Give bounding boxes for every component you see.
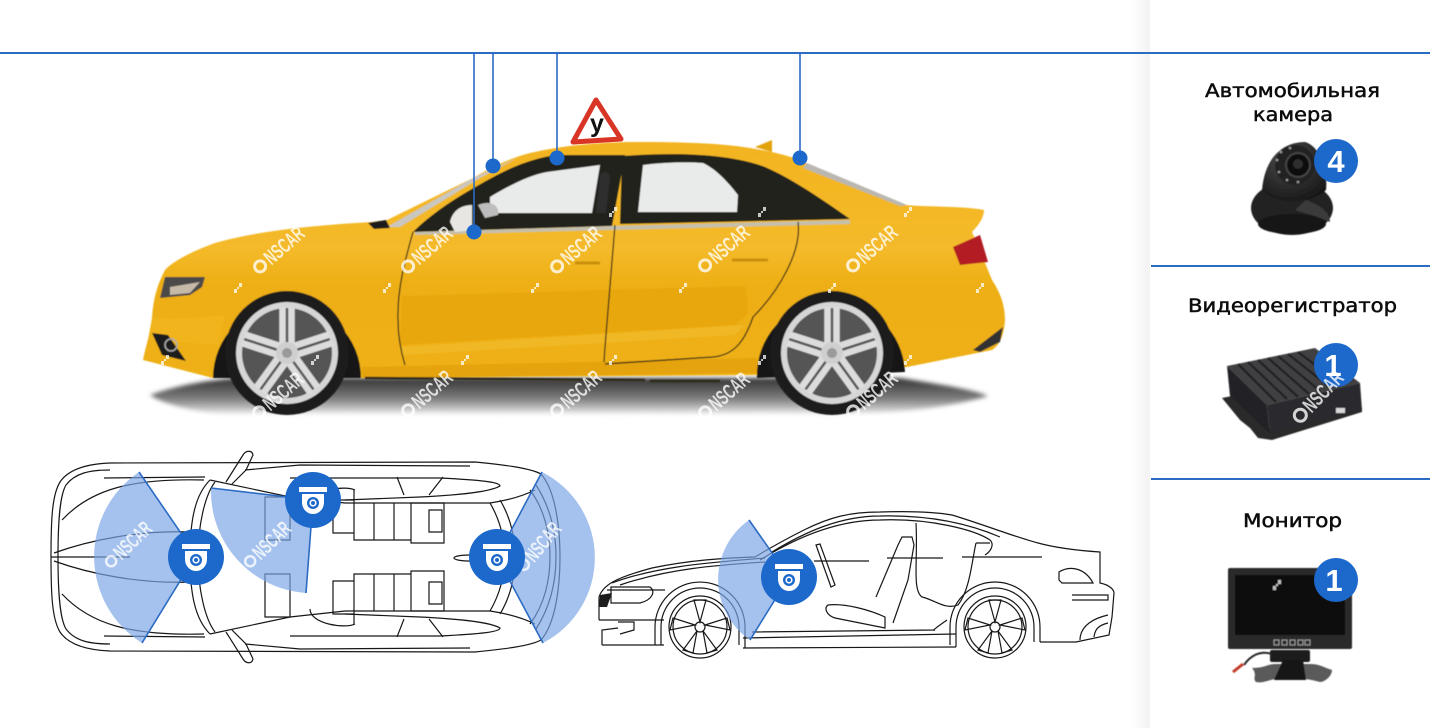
camera icon: rear xyxy=(469,529,525,585)
student driver roof sign xyxy=(573,100,621,142)
top blue rule xyxy=(0,52,1430,54)
count badge: 4 cameras xyxy=(1314,139,1358,183)
count badge: 1 recorder: 1 xyxy=(1324,348,1342,383)
watermarks on sedan xyxy=(161,207,984,425)
watermarks on sedan: NSCAR xyxy=(853,367,903,415)
watermarks on sedan: NSCAR xyxy=(259,368,309,416)
count badge: 1 recorder xyxy=(1314,343,1358,387)
camera icon: side view xyxy=(761,549,817,605)
label: automotive camera: Автомобильная xyxy=(1205,81,1380,102)
camera coverage: cabin xyxy=(211,488,313,593)
camera position markers with leader lines xyxy=(466,53,808,240)
divider: recorder section xyxy=(1151,478,1430,480)
watermarks on top view: NSCAR xyxy=(248,517,296,564)
watermarks on top view xyxy=(100,517,566,576)
divider: camera section xyxy=(1151,265,1430,267)
top-view car line drawing xyxy=(51,451,560,663)
watermarks on sedan: NSCAR xyxy=(705,368,755,416)
label: monitor: Монитор xyxy=(1243,511,1342,532)
camera coverage: front xyxy=(94,472,196,643)
camera coverage: rear xyxy=(497,472,595,643)
label: automotive camera: камера xyxy=(1253,105,1333,126)
product: dome camera xyxy=(1251,142,1333,235)
label: automotive camera xyxy=(1205,81,1380,126)
watermarks on sedan: NSCAR xyxy=(853,221,903,269)
watermark on recorder xyxy=(1288,367,1349,428)
camera icon: front xyxy=(168,529,224,585)
watermarks on sedan: NSCAR xyxy=(408,222,458,270)
yellow sedan photo xyxy=(143,140,1005,425)
side-view car line drawing xyxy=(599,512,1114,658)
watermarks on top view: NSCAR xyxy=(109,517,157,564)
count badge: 1 monitor xyxy=(1314,558,1358,602)
product: video recorder xyxy=(1222,348,1362,440)
watermarks on sedan: NSCAR xyxy=(557,222,607,270)
watermarks on sedan: NSCAR xyxy=(557,366,607,414)
product: monitor xyxy=(1228,568,1352,682)
student driver roof sign: у xyxy=(590,110,604,138)
watermarks on sedan: NSCAR xyxy=(260,222,310,270)
camera coverage: side view xyxy=(718,520,789,640)
watermarks on top view: NSCAR xyxy=(521,518,566,566)
watermarks on sedan: NSCAR xyxy=(705,221,755,269)
watermark on recorder: NSCAR xyxy=(1299,367,1349,417)
count badge: 4 cameras: 4 xyxy=(1327,144,1345,179)
panel shadow edge xyxy=(1130,0,1150,728)
label: video recorder: Видеорегистратор xyxy=(1188,296,1397,317)
count badge: 1 monitor: 1 xyxy=(1325,563,1343,598)
watermarks on sedan: NSCAR xyxy=(408,366,458,414)
camera icon: cabin xyxy=(285,472,341,528)
